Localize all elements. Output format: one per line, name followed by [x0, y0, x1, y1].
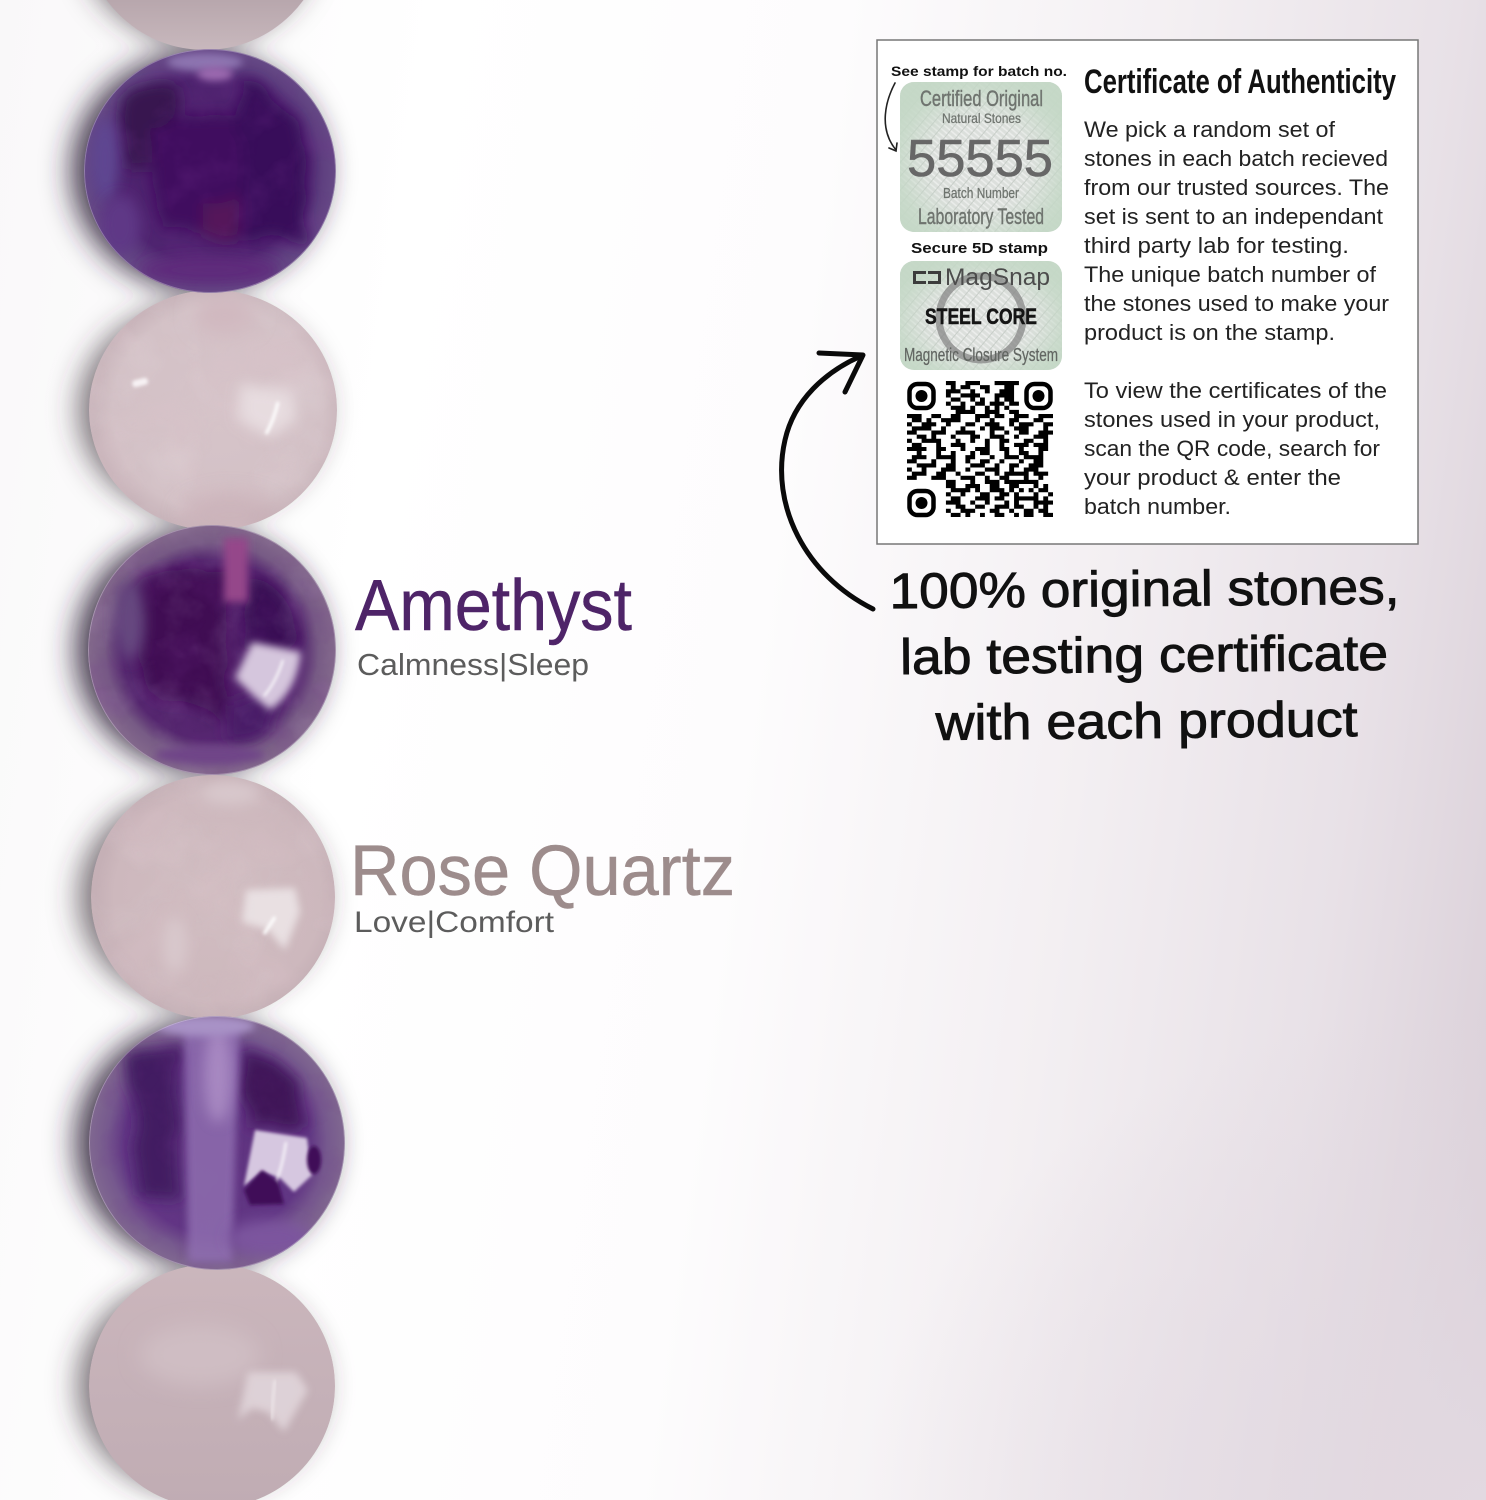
certificate text: testing process: set is sent to an independant	[1084, 204, 1383, 229]
stamp: MagSnap steel core	[900, 261, 1062, 370]
rose quartz bead: top	[83, 0, 327, 50]
certificate text: testing process: The unique batch number of	[1084, 262, 1377, 287]
benefits: Love|Comfort	[354, 906, 555, 939]
certificate text: how to view: stones used in your product,	[1084, 407, 1380, 432]
amethyst bead 1	[84, 49, 336, 293]
certificate text: testing process: stones in each batch recieved	[1084, 146, 1388, 171]
certificate text: how to view: your product & enter the	[1084, 465, 1341, 490]
background tint	[600, 800, 1486, 1500]
amethyst bead 3	[88, 525, 336, 775]
stamp: batch number: 55555	[907, 130, 1053, 188]
stamp: batch number: Certified Original	[920, 86, 1043, 111]
stamp caption 2: Secure 5D stamp	[911, 240, 1048, 257]
callout: original stones: lab testing certificate	[900, 625, 1388, 685]
callout: original stones: 100% original stones,	[889, 559, 1400, 619]
rose quartz bead 4	[91, 775, 335, 1019]
icon: small arrow to stamp	[885, 83, 897, 151]
certificate text: how to view: To view the certificates of the	[1084, 378, 1387, 403]
amethyst bead 5	[89, 1016, 345, 1270]
certificate text: how to view	[1084, 378, 1387, 519]
certificate text: testing process: We pick a random set of	[1084, 117, 1336, 142]
panel: certificate of authenticity	[877, 40, 1418, 544]
certificate text: how to view: scan the QR code, search for	[1084, 436, 1380, 461]
certificate text: testing process: the stones used to make your	[1084, 291, 1389, 316]
rose quartz bead 6	[89, 1264, 335, 1500]
stamp: batch number: Natural Stones	[942, 110, 1021, 126]
stamp caption: See stamp for batch no.	[891, 64, 1067, 79]
certificate text: testing process: from our trusted sources. The	[1084, 175, 1389, 200]
bead strand	[72, 0, 345, 1500]
stamp: batch number: Batch Number	[943, 185, 1019, 202]
stamp: batch number	[900, 82, 1062, 232]
QR code	[907, 383, 1058, 515]
arrow: curved arrow to certificate	[782, 353, 873, 609]
stamp: batch number: Laboratory Tested	[918, 204, 1044, 229]
stamp: MagSnap steel core: MagSnap	[945, 264, 1050, 291]
name: Amethyst	[355, 566, 632, 646]
callout: original stones	[889, 559, 1401, 751]
certificate text: how to view: batch number.	[1084, 494, 1231, 519]
certificate text: testing process: product is on the stamp.	[1084, 320, 1335, 345]
callout: original stones: with each product	[934, 691, 1358, 751]
bead shadow	[72, 0, 332, 1494]
certificate text: testing process: third party lab for testing.	[1084, 233, 1349, 258]
certificate text: testing process	[1084, 117, 1389, 345]
stamp: MagSnap steel core: Magnetic Closure System	[904, 345, 1058, 365]
benefits: Calmness|Sleep	[357, 647, 589, 682]
certificate heading: Certificate of Authenticity	[1084, 63, 1396, 101]
label: Rose Quartz	[350, 832, 735, 939]
name: Rose Quartz	[350, 832, 735, 911]
stamp: MagSnap steel core: STEEL CORE	[925, 304, 1037, 329]
rose quartz bead 2	[89, 290, 337, 537]
label: Amethyst	[355, 566, 632, 682]
